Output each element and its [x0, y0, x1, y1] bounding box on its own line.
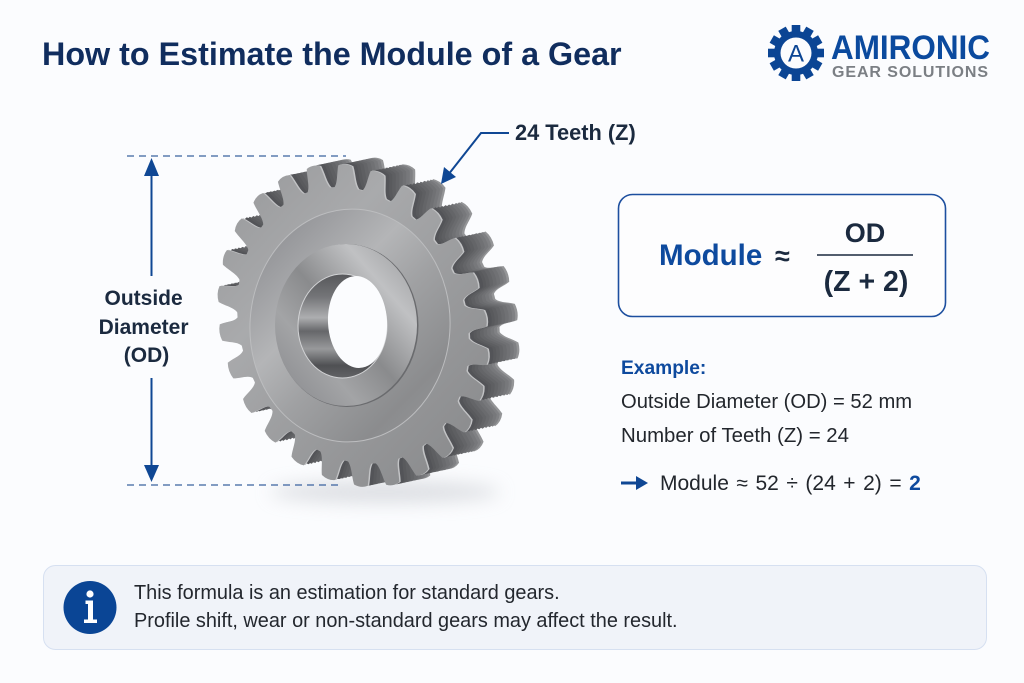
gear illustration [218, 158, 520, 508]
denominator: (Z + 2) [824, 266, 908, 298]
note background [44, 566, 986, 650]
arrow down [144, 378, 159, 482]
formula box [618, 194, 946, 316]
bore inner wall [298, 274, 387, 378]
fraction bar [817, 254, 913, 256]
note panel [44, 566, 986, 650]
gear front face [218, 164, 488, 487]
icon: logo gear [768, 25, 824, 81]
note text: This formula is an estimation for standard gears. [134, 582, 560, 604]
gear teeth extrusion [211, 145, 528, 499]
approx sign: ≈ [775, 241, 790, 271]
formula frame [618, 194, 946, 316]
callout label: 24 Teeth (Z) [515, 120, 636, 145]
icon: logo gear: A [788, 40, 804, 68]
top dashed guide [127, 155, 346, 157]
given: number of teeth: Number of Teeth (Z) = 24 [621, 425, 849, 447]
example block [621, 358, 921, 495]
logo name: AMIRONIC [831, 29, 990, 67]
arrow up [144, 158, 159, 276]
given: outside diameter: Outside Diameter (OD) = 52 mm [621, 391, 912, 413]
icon: result arrow [621, 476, 648, 490]
example heading: Example: [621, 358, 706, 379]
label: outside diameter: Outside [104, 287, 183, 310]
callout leader arrow [441, 133, 509, 184]
bottom dashed guide [127, 484, 342, 486]
teeth callout [441, 120, 636, 184]
label: outside diameter: Diameter [99, 316, 189, 339]
icon: info [64, 581, 116, 634]
formula left side: Module [659, 239, 762, 272]
note text: Profile shift, wear or non-standard gears may affect the result. [134, 610, 678, 632]
title: How to Estimate the Module of a Gear [42, 36, 622, 72]
bore hole [326, 275, 389, 369]
outside diameter dimension [99, 156, 346, 485]
logo: Amironic Gear Solutions [768, 25, 990, 81]
gear raised ring [242, 202, 458, 449]
numerator: OD [845, 218, 885, 248]
gear ground shadow [270, 481, 500, 503]
result line: Module ≈ 52 ÷ (24 + 2) = 2 [660, 472, 921, 495]
hub shadow edge [276, 244, 418, 407]
hub face [275, 244, 417, 406]
logo tagline: GEAR SOLUTIONS [832, 64, 988, 81]
label: outside diameter: (OD) [124, 344, 169, 367]
